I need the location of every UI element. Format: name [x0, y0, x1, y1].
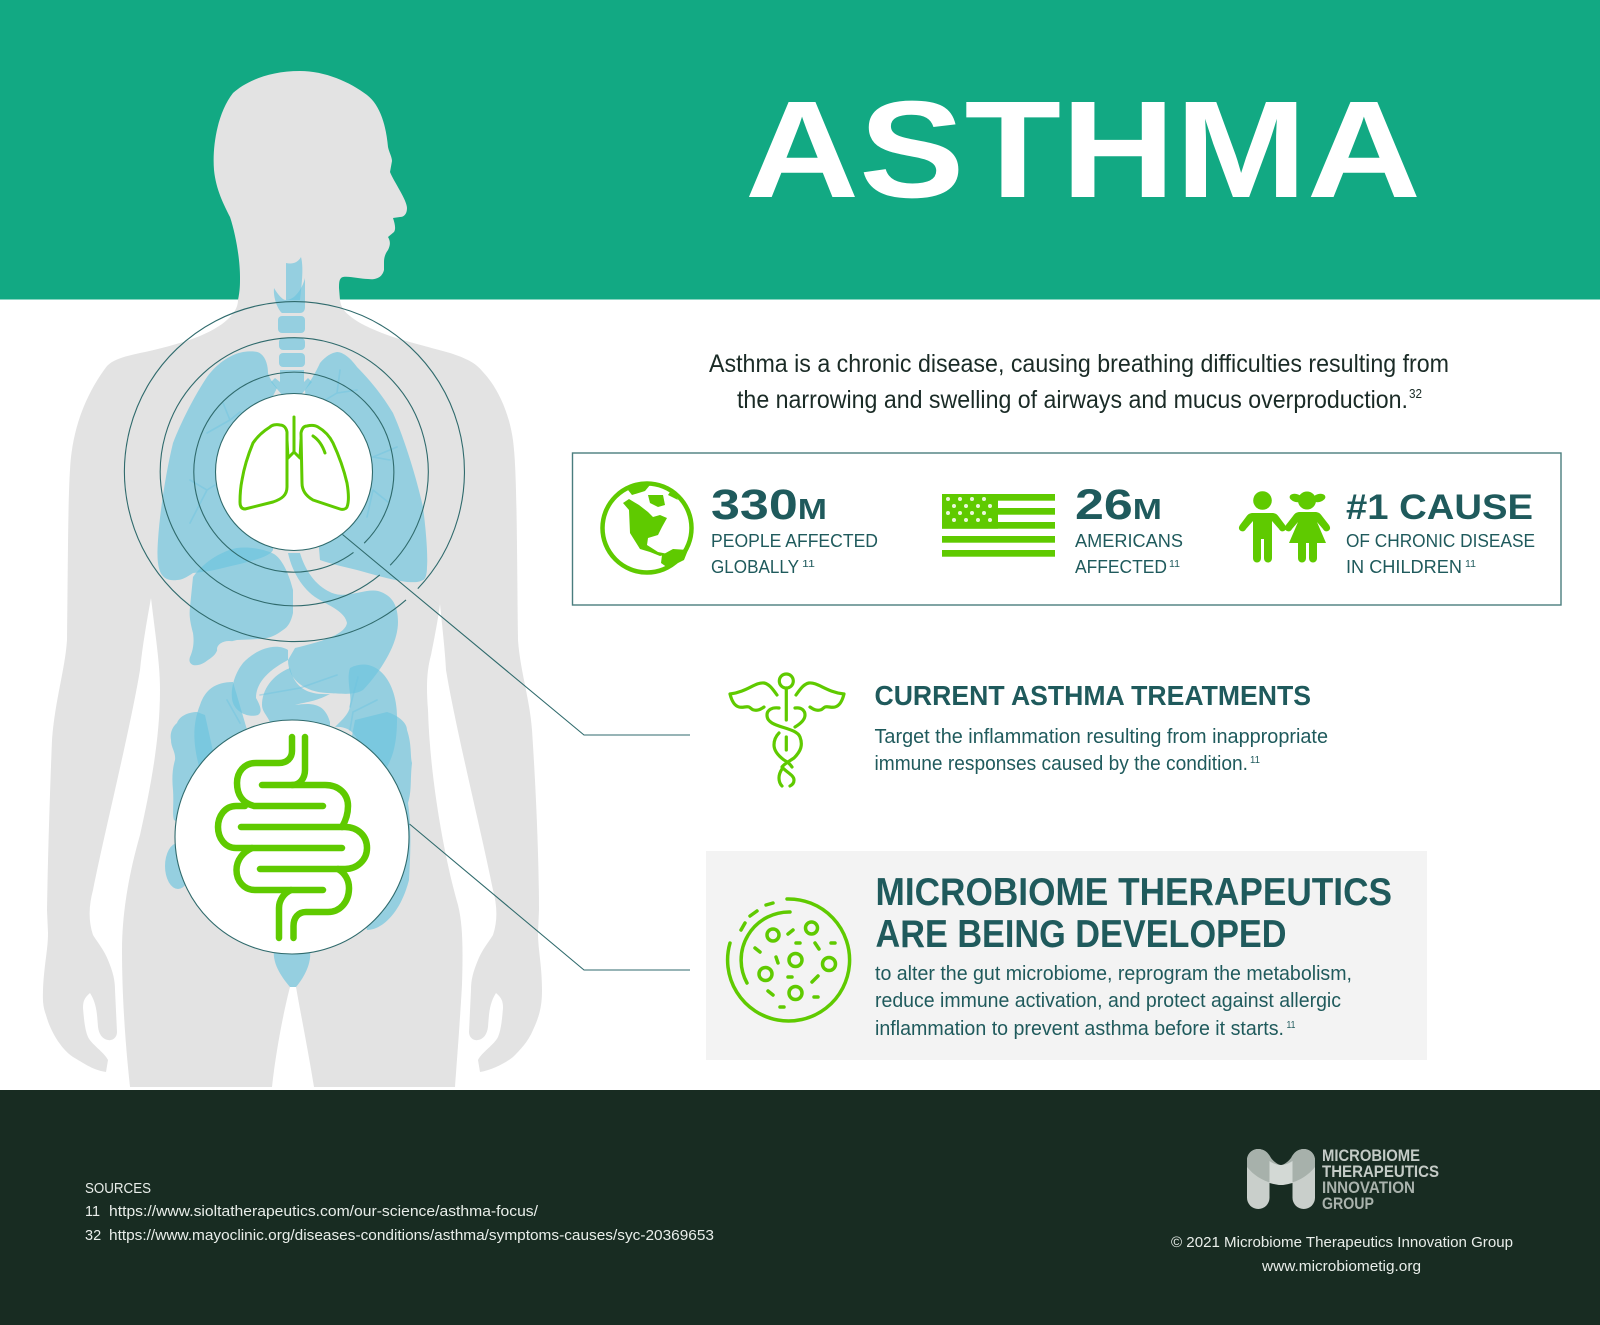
organ: small intestine — [262, 668, 330, 735]
text block: current treatments: Target the inflammation resulting from inappropriate — [874, 726, 1328, 748]
intro text — [709, 350, 1449, 414]
panel: microbiome therapeutics — [706, 851, 1427, 1060]
intestine callout circle — [175, 720, 409, 954]
organ: small bowel loop — [194, 682, 250, 770]
text block: microbiome heading: ARE BEING DEVELOPED — [876, 913, 1286, 956]
stat: number one cause: IN CHILDREN — [1346, 556, 1462, 577]
text block: microbiome description: 11 — [1286, 1020, 1296, 1031]
header band — [0, 0, 1600, 300]
organ: blood vessels — [190, 370, 397, 730]
stat: 330M: 11 — [802, 559, 816, 570]
text block: current treatments: immune responses caused by the condition. — [874, 753, 1248, 775]
stat: 26M: 26 M — [1075, 481, 1162, 529]
stat: 330M: 330 M — [711, 481, 827, 529]
connector line: lungs — [342, 534, 690, 735]
internal organs — [157, 257, 427, 987]
organ: cecum — [165, 843, 191, 889]
connector line: intestine — [410, 824, 690, 970]
text block: current treatments: CURRENT ASTHMA TREATMENTS — [874, 680, 1311, 711]
sources: https://www.mayoclinic.org/diseases-conditions/asthma/symptoms-causes/syc-20369653 — [109, 1228, 714, 1244]
title: ASTHMA — [745, 73, 1421, 227]
intro text: the narrowing and swelling of airways and mucus overproduction. — [737, 386, 1408, 414]
text block: microbiome description: reduce immune activation, and protect against allergic — [875, 990, 1341, 1012]
text block: microbiome description — [875, 963, 1352, 1040]
text block: microbiome heading — [876, 871, 1392, 956]
icon: microbes in petri dish — [728, 899, 850, 1021]
logo: Microbiome Therapeutics Innovation Group — [1247, 1146, 1439, 1213]
stat: 26M: 11 — [1169, 559, 1180, 570]
panel: key statistics — [572, 453, 1561, 605]
stat: 330M: GLOBALLY — [711, 556, 799, 577]
concentric rings around lungs — [124, 302, 464, 642]
logo: Microbiome Therapeutics Innovation Group: MICROBIOME — [1322, 1146, 1420, 1165]
organ: descending colon — [340, 712, 412, 930]
sources: https://www.sioltatherapeutics.com/our-science/asthma-focus/ — [109, 1204, 539, 1220]
organ: ascending colon — [171, 712, 215, 830]
organ: left lung — [157, 351, 277, 580]
intro text: Asthma is a chronic disease, causing breathing difficulties resulting from — [709, 350, 1449, 378]
copyright: © 2021 Microbiome Therapeutics Innovation Group — [1171, 1234, 1513, 1251]
organ: stomach — [288, 553, 398, 694]
stat: number one cause — [1346, 488, 1535, 577]
stat: 26M: AFFECTED — [1075, 556, 1167, 577]
stat: number one cause: #1 CAUSE — [1346, 488, 1533, 527]
organ: jejunum — [232, 647, 288, 716]
icon: children — [1239, 491, 1330, 562]
logo: Microbiome Therapeutics Innovation Group: INNOVATION — [1322, 1178, 1415, 1197]
stat: 330M — [711, 481, 878, 577]
sources: 11 — [85, 1204, 100, 1220]
organ: right lung — [305, 352, 427, 582]
icon: lungs — [240, 417, 348, 509]
logo: Microbiome Therapeutics Innovation Group: GROUP — [1322, 1194, 1374, 1213]
human body silhouette — [43, 71, 542, 1087]
lung callout circle — [216, 394, 372, 550]
footer band — [0, 1090, 1600, 1325]
icon: caduceus — [730, 674, 844, 786]
website: www.microbiometig.org — [1261, 1258, 1421, 1275]
stat: 26M — [1075, 481, 1183, 577]
sources — [85, 1181, 714, 1244]
text block: microbiome description: to alter the gut microbiome, reprogram the metabolism, — [875, 963, 1352, 985]
organ: larynx and trachea — [271, 257, 312, 396]
stat: number one cause: 11 — [1465, 559, 1476, 570]
organ: liver — [189, 547, 293, 665]
sources: 32 — [85, 1228, 101, 1244]
text block: microbiome heading: MICROBIOME THERAPEUTICS — [876, 871, 1392, 914]
sources: SOURCES — [85, 1181, 151, 1197]
organ: gallbladder — [217, 641, 241, 657]
stat: 26M: AMERICANS — [1075, 530, 1183, 551]
stat: 330M: PEOPLE AFFECTED — [711, 530, 878, 551]
stat: number one cause: OF CHRONIC DISEASE — [1346, 530, 1535, 551]
organ: transverse colon arch — [335, 665, 397, 770]
icon: intestine — [218, 737, 367, 938]
icon: American flag — [942, 494, 1055, 557]
organ: bladder — [274, 950, 310, 987]
icon: globe — [602, 484, 692, 572]
text block: current treatments — [874, 680, 1328, 775]
intro text: 32 — [1409, 386, 1422, 401]
text block: microbiome description: inflammation to prevent asthma before it starts. — [875, 1018, 1284, 1040]
logo: Microbiome Therapeutics Innovation Group: THERAPEUTICS — [1322, 1162, 1439, 1181]
text block: current treatments: 11 — [1250, 755, 1260, 766]
